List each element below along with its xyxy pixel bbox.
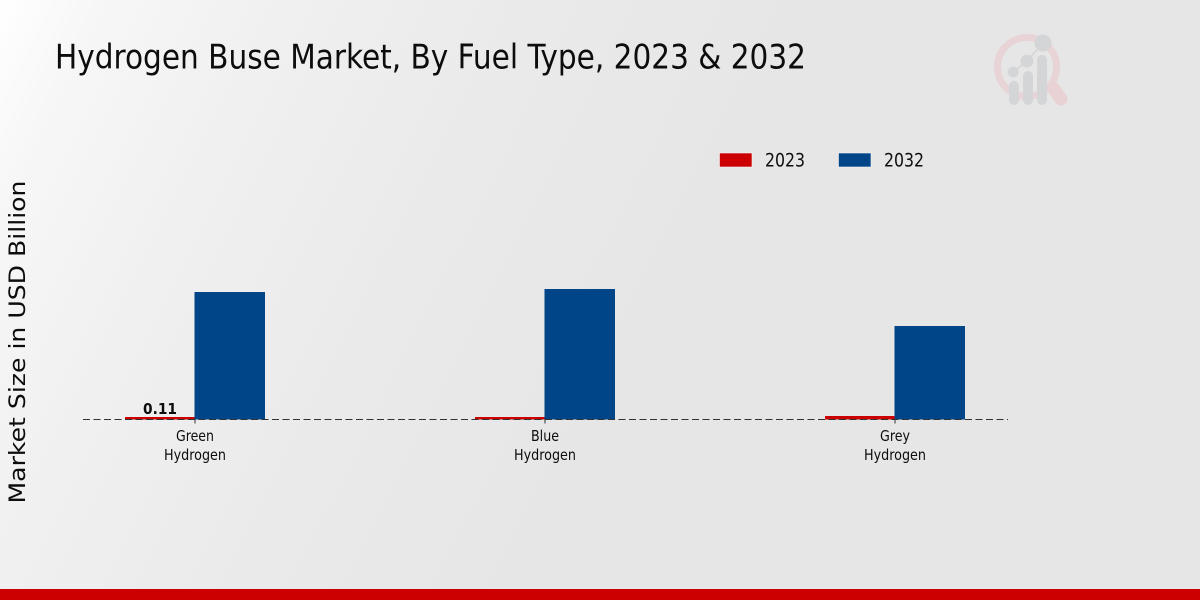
category label: Blue Hydrogen: Hydrogen: [514, 446, 576, 464]
legend label: 2032: 2032: [884, 150, 924, 172]
bar chart: [83, 289, 1008, 464]
category label: Green Hydrogen: Green: [176, 427, 214, 445]
category label: Grey Hydrogen: Hydrogen: [864, 446, 926, 464]
category label: Green Hydrogen: Hydrogen: [164, 446, 226, 464]
category label: Blue Hydrogen: [514, 427, 576, 464]
legend swatch: 2023: [720, 153, 752, 167]
bars: Blue Hydrogen: [475, 289, 615, 420]
y-axis label: Market Size in USD Billion: [5, 180, 31, 504]
icon: watermark logo magnifier with bars: [998, 34, 1061, 100]
category label: Grey Hydrogen: [864, 427, 926, 464]
bottom red band: [0, 589, 1200, 600]
legend: [720, 150, 924, 172]
category label: Grey Hydrogen: Grey: [880, 427, 910, 445]
title: Hydrogen Buse Market, By Fuel Type, 2023 & 2032: [55, 38, 806, 78]
legend swatch: 2032: [838, 153, 871, 167]
bars: Grey Hydrogen: [825, 326, 965, 420]
bars: Green Hydrogen: [125, 292, 265, 420]
category label: Blue Hydrogen: Blue: [531, 427, 559, 445]
value label: 0.11: 0.11: [143, 400, 177, 418]
category label: Green Hydrogen: [164, 427, 226, 464]
legend label: 2023: 2023: [765, 150, 805, 172]
